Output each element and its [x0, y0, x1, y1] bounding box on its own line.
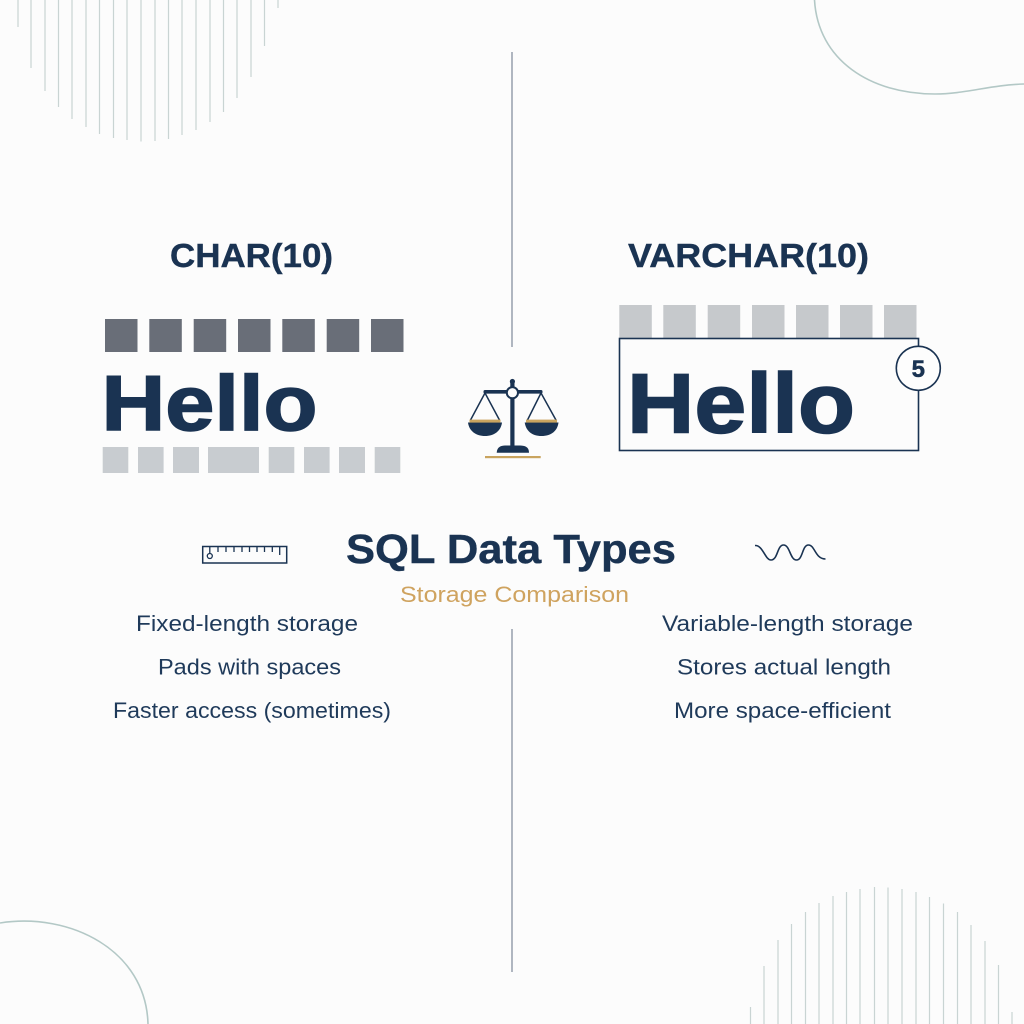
outlined value box — [620, 338, 918, 450]
title: SQL Data Types: SQL Data Types — [346, 526, 676, 572]
length badge: 5 — [896, 346, 940, 390]
text block: VARCHAR traits: More space-efficient — [674, 698, 891, 723]
padding cells — [103, 447, 400, 473]
icon: ruler — [203, 546, 287, 563]
light character cells — [619, 305, 916, 338]
text block: VARCHAR traits: Stores actual length — [677, 654, 891, 680]
word: Hello: Hello — [627, 356, 855, 450]
text block: CHAR traits: Faster access (sometimes) — [113, 698, 391, 723]
text block: VARCHAR traits — [662, 611, 913, 723]
dark character cells — [105, 319, 404, 352]
heading: CHAR(10): CHAR(10) — [170, 237, 333, 274]
text block: VARCHAR traits: Variable-length storage — [662, 611, 913, 636]
icon: wave — [755, 545, 826, 560]
word: Hello: Hello — [102, 359, 318, 447]
text block: CHAR traits: Pads with spaces — [158, 654, 341, 680]
text block: CHAR traits: Fixed-length storage — [136, 611, 358, 636]
panel: VARCHAR(10) diagram — [619, 237, 940, 450]
length badge: 5: 5 — [912, 356, 925, 383]
heading: VARCHAR(10): VARCHAR(10) — [628, 237, 869, 274]
subtitle: Storage Comparison: Storage Comparison — [400, 582, 629, 607]
panel: CHAR(10) diagram — [102, 237, 404, 473]
text block: CHAR traits — [113, 611, 391, 723]
icon: balance scale — [468, 379, 558, 458]
